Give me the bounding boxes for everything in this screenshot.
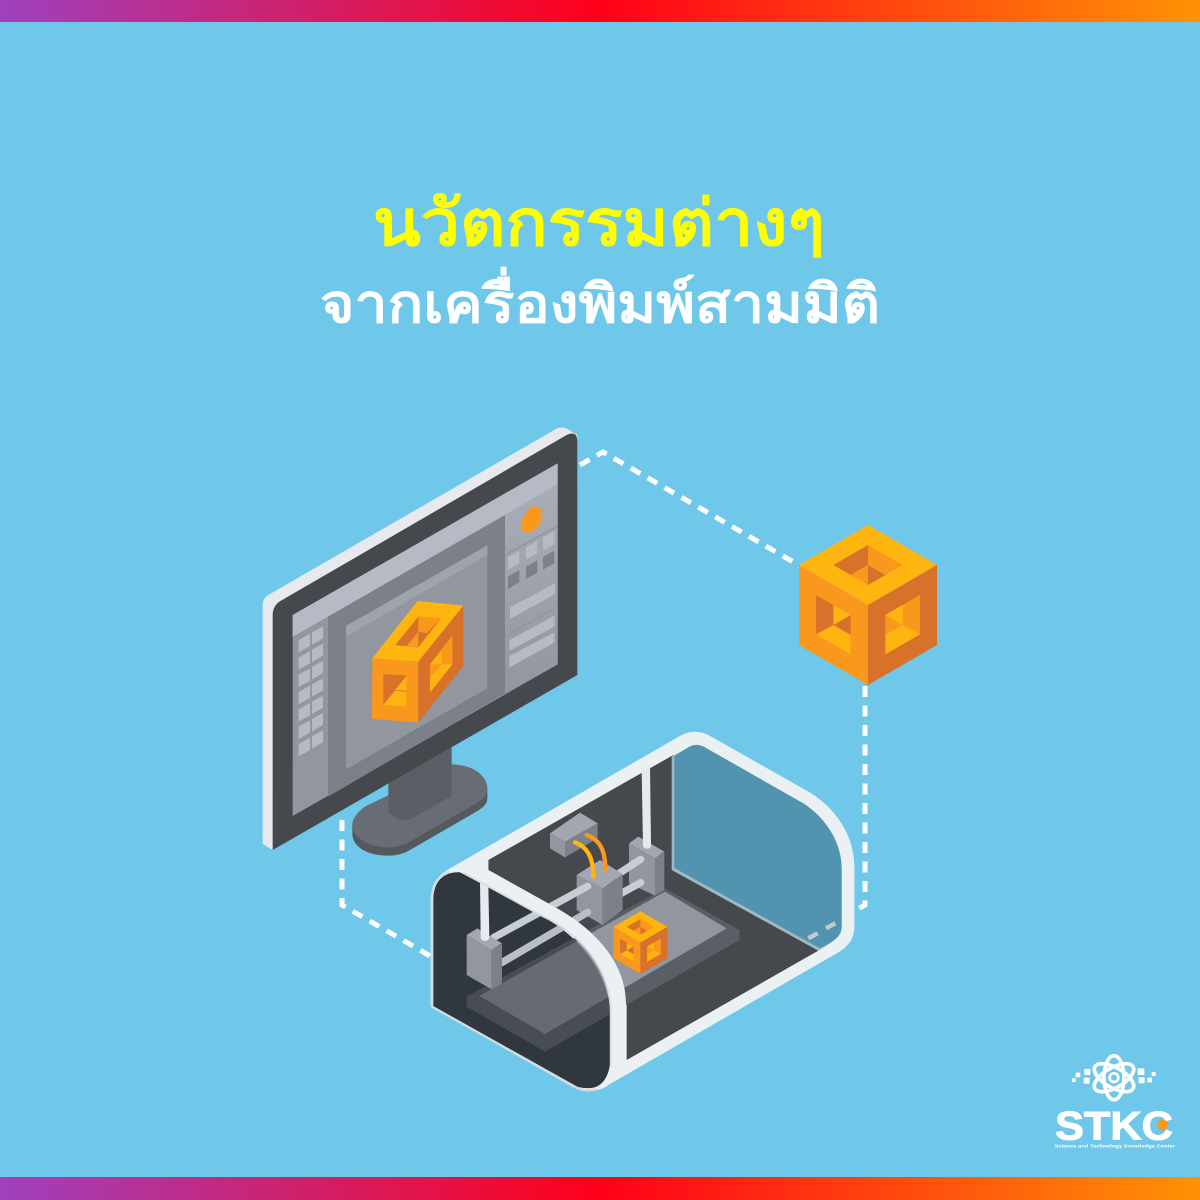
STKC logo [1054, 1056, 1175, 1149]
3D printer [431, 732, 854, 1091]
logo orange dot [1157, 1120, 1168, 1130]
on-screen cube model [372, 601, 463, 723]
front arch of shell [452, 848, 626, 1090]
dashed connector: monitor to cube [580, 452, 802, 567]
monitor stand neck [388, 740, 452, 820]
filament box [550, 813, 598, 857]
orange hexagon swatch [522, 506, 542, 533]
front opening [433, 872, 611, 1088]
logo wordmark: STKC [1055, 1105, 1173, 1149]
right vertical pole [642, 765, 651, 849]
viewport surround [328, 515, 505, 797]
logo pixel squares [1072, 1068, 1156, 1084]
right tool panel [505, 484, 558, 693]
screen top band [293, 463, 558, 637]
screen [293, 463, 558, 816]
monitor bezel [273, 433, 577, 850]
front opening shade [433, 872, 611, 1088]
small printed cube [613, 911, 667, 974]
printer glass side window [672, 745, 842, 951]
right panel sliders [509, 583, 555, 667]
left vertical pole [480, 880, 489, 941]
canvas [346, 545, 487, 769]
left block [467, 928, 502, 989]
left tool buttons [299, 626, 323, 756]
large orange cube [799, 525, 937, 685]
printer interior and floor [488, 755, 818, 1060]
right panel swatches [508, 532, 554, 570]
title line 1: นวัตกรรมต่างๆ [373, 187, 825, 259]
monitor outer edge [263, 427, 577, 850]
shell lower left rim [432, 1007, 597, 1090]
title [320, 187, 880, 334]
top gradient bar [0, 0, 1200, 22]
logo tagline: Science and Technology Knowledge Center [1054, 1144, 1175, 1149]
printer shell [431, 732, 854, 1091]
build plate [467, 888, 739, 1052]
rear guide rods [617, 859, 641, 894]
dashed connector: cube to printer [858, 686, 865, 909]
title line 2: จากเครื่องพิมพ์สามมิติ [320, 266, 880, 334]
right block [629, 837, 664, 896]
filament tubes [575, 835, 605, 877]
monitor stand base [352, 764, 487, 856]
dashed connector: monitor to printer [342, 820, 432, 957]
print head carriage [577, 860, 623, 925]
glass dashes [808, 923, 835, 938]
monitor [263, 427, 577, 856]
bottom gradient bar [0, 1177, 1200, 1200]
front guide rods [494, 886, 588, 963]
logo atom icon [1090, 1056, 1138, 1100]
